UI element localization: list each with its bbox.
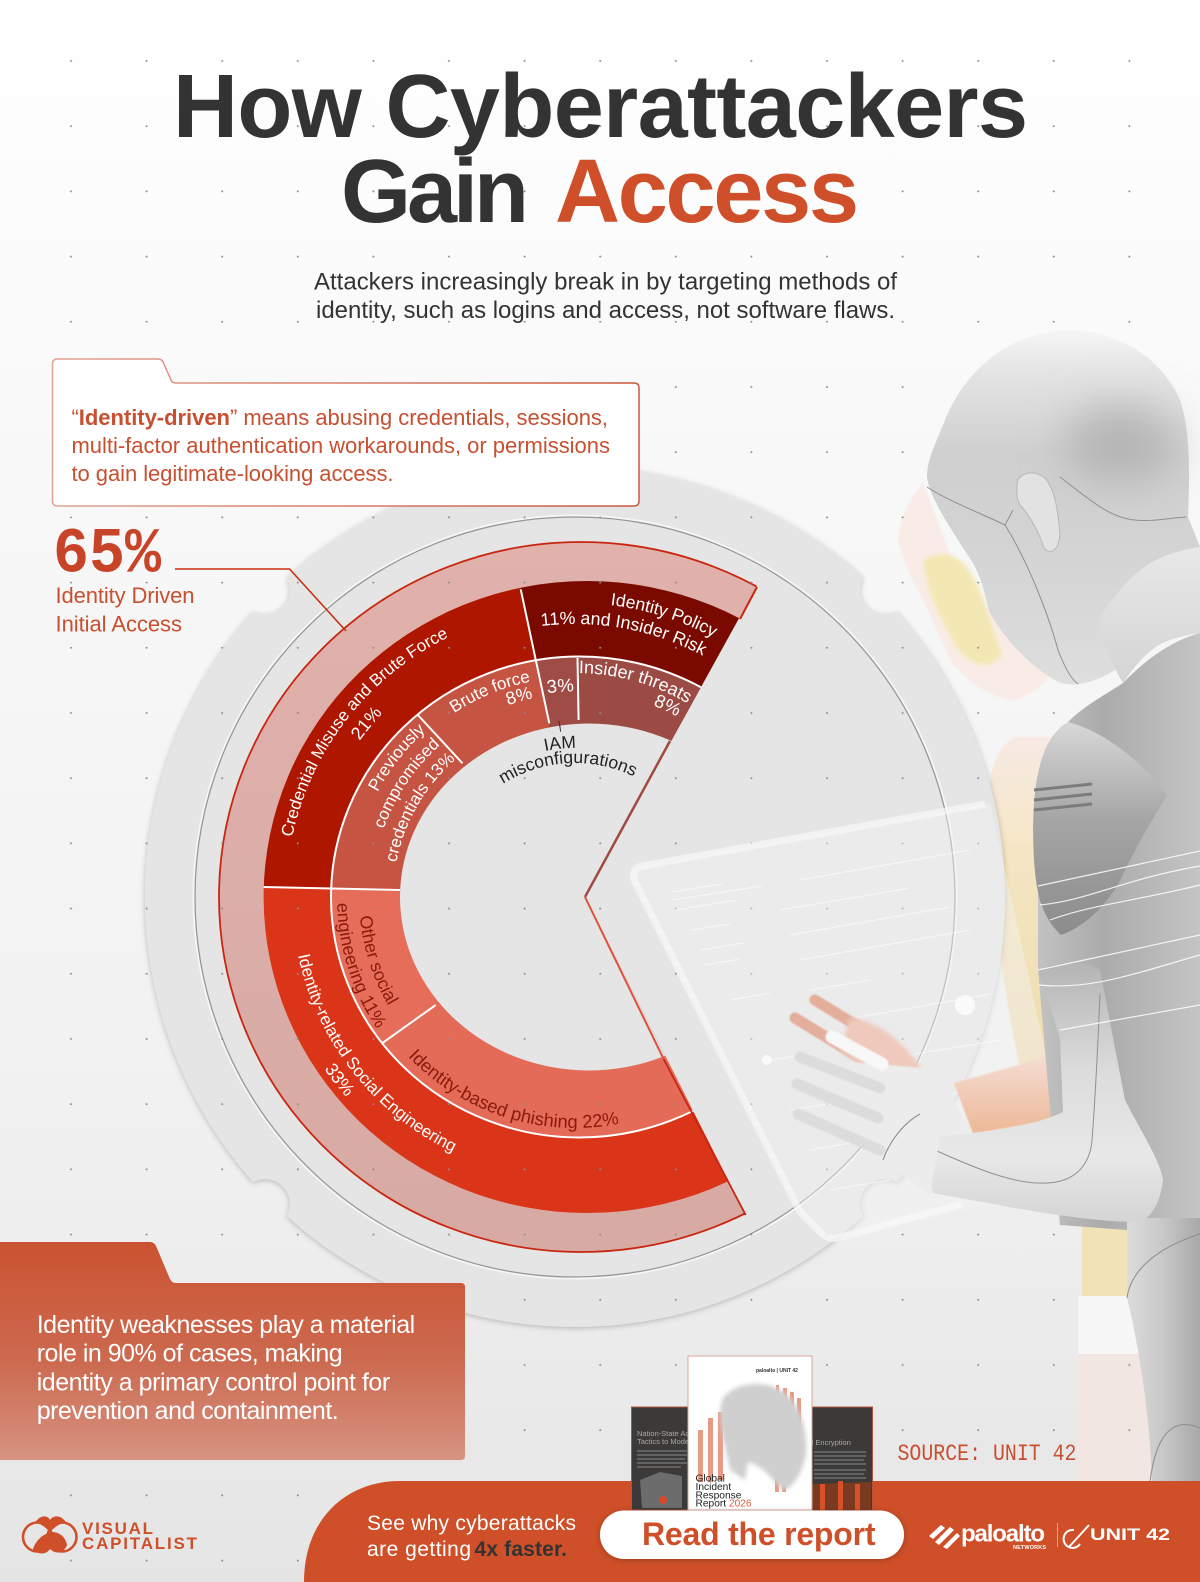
panel: identity weaknesses: Identity weaknesses play a material [37,1311,415,1339]
segment: Credential Misuse and Brute Force [264,588,550,892]
logo: Palo Alto Networks and Unit 42: paloalto [961,1520,1045,1548]
chart labels: 11% and Insider Risk [542,612,707,656]
chart labels: 8% [654,694,680,716]
robot shoulder [1033,722,1167,935]
white panel behind robot [1078,1296,1140,1354]
dark red labels: Other social [360,916,399,1005]
logo: Palo Alto Networks and Unit 42: NETWORKS [1013,1545,1046,1551]
glass tablet [633,803,1075,1238]
segment: Other social engineering [332,890,439,1042]
report cover [688,1356,812,1510]
robot arm [920,962,1163,1222]
callout: identity-driven definition: to gain legitimate-looking access. [72,461,394,486]
title: How Cyberattackers [173,57,1028,157]
panel: identity weaknesses: identity a primary control point for [37,1368,390,1396]
stat: 65% identity driven: Initial Access [56,612,182,636]
chart labels: 33% [326,1064,354,1096]
logo: Palo Alto Networks and Unit 42 [929,1520,1170,1551]
segment: Identity-related Social Engineering [264,887,728,1213]
segment: Previously compromised credentials [332,716,465,891]
report cover: Global [696,1474,725,1484]
left dark page [631,1406,688,1510]
chart labels: Brute force [449,674,530,712]
logo: Visual Capitalist: CAPITALIST [82,1534,198,1553]
segment: Brute force [419,661,550,766]
callout: identity-driven definition: multi-factor authentication workarounds, or permissions [72,433,610,458]
ghost lower body [1082,1222,1132,1296]
chart labels: Identity Policy [612,593,718,638]
CTA text: 4x faster. [474,1538,567,1561]
chart labels [282,593,718,1154]
wrist seam [883,1114,920,1160]
source: SOURCE: UNIT 42 [898,1441,1076,1467]
robot torso [1038,633,1200,1230]
stat: 65% identity driven: Identity Driven [56,583,194,608]
robot hand [797,1037,973,1195]
sunburst chart [218,541,758,1253]
callout: identity-driven definition: “Identity-driven” means abusing credentials, sessions, [72,405,608,430]
title: Gain [341,142,529,242]
chart labels: Identity-related Social Engineering [298,954,456,1154]
panel: identity weaknesses: role in 90% of cases, making [37,1340,343,1368]
chart labels: 21% [352,707,381,740]
CTA text: See why cyberattacks [367,1512,576,1535]
elbow seam [937,994,1100,1183]
report cover: Response [696,1490,742,1501]
IAM misconfigurations label: misconfigurations [499,750,636,784]
report mockup pages [632,1356,872,1510]
segment: Insider threats [577,658,701,742]
ghost hair and face [898,483,1050,700]
subtitle [314,268,897,324]
callout: identity-driven definition [52,359,639,506]
title: Access [555,142,859,242]
dark red labels: engineering 11% [335,904,386,1028]
chart labels: 3% [547,678,574,693]
report cover: Incident [696,1482,731,1493]
shoulder vents [1034,784,1092,810]
logo: Visual Capitalist [23,1516,198,1554]
stat: 65% identity driven [53,520,194,636]
logo: Visual Capitalist: VISUAL [82,1519,153,1538]
right dark page: nd Encryption [805,1438,851,1447]
subtitle: identity, such as logins and access, not software flaws. [316,297,895,324]
ghost blond hair [923,554,1002,665]
CTA text: are getting [367,1538,471,1561]
robot ear [1017,473,1060,552]
robot head [927,330,1200,685]
background human figure ghost [898,483,1152,1482]
ghost torso [990,737,1070,1118]
panel: identity weaknesses: prevention and containment. [37,1397,339,1425]
robot figure [797,330,1200,1482]
chart labels: compromised [376,736,440,828]
title [173,57,1028,242]
dark red labels: Identity-based phishing 22% [409,1049,618,1132]
head seams [927,477,1186,684]
leader line [175,569,346,631]
robot hip seams [1127,1234,1200,1482]
logo icon [23,1516,76,1554]
IAM misconfigurations label: IAM [544,736,575,751]
call to action bar [304,1481,1200,1582]
chart labels: credentials 13% [388,753,454,862]
segment: Identity Policy and Insider Risk [520,581,739,742]
pink panel behind robot [1078,1354,1152,1482]
chart labels: Credential Misuse and Brute Force [282,630,447,836]
light wires [1038,851,1200,1030]
IAM misconfigurations label [499,720,636,784]
robot neck [1100,547,1200,683]
chart labels: 8% [506,686,532,704]
left dark page: Nation-State Actors Are A [637,1429,722,1438]
stat: 65% identity driven: 65% [53,520,162,592]
chart labels: Insider threats [580,660,691,702]
CTA text [367,1512,576,1561]
white ring separator and centre hole [330,656,702,1138]
robot lower body [1127,1218,1200,1482]
dark red labels [335,904,618,1132]
outer pale ring [218,541,757,1253]
wedge edge lines [585,587,757,1215]
ghost arm and hand [795,1000,1063,1134]
left dark page: Tactics to Modern Enviro [637,1437,719,1446]
panel: identity weaknesses [0,1242,465,1460]
subtitle: Attackers increasingly break in by targeting methods of [314,268,897,296]
white dividers [264,589,579,1043]
logo: Palo Alto Networks and Unit 42: UNIT 42 [1090,1525,1170,1544]
segment: Identity-based phishing [384,948,692,1136]
report cover: Report 2026 [696,1499,752,1510]
button: read the report [600,1510,904,1559]
segment: IAM misconfigurations [537,658,580,728]
button: read the report: Read the report [642,1516,876,1552]
head shading [1065,407,1175,483]
segmented disc backing plate [145,467,1005,1327]
report cover: paloalto | UNIT 42 [756,1368,798,1374]
right dark page [805,1407,872,1510]
chart labels: Previously [368,724,424,791]
